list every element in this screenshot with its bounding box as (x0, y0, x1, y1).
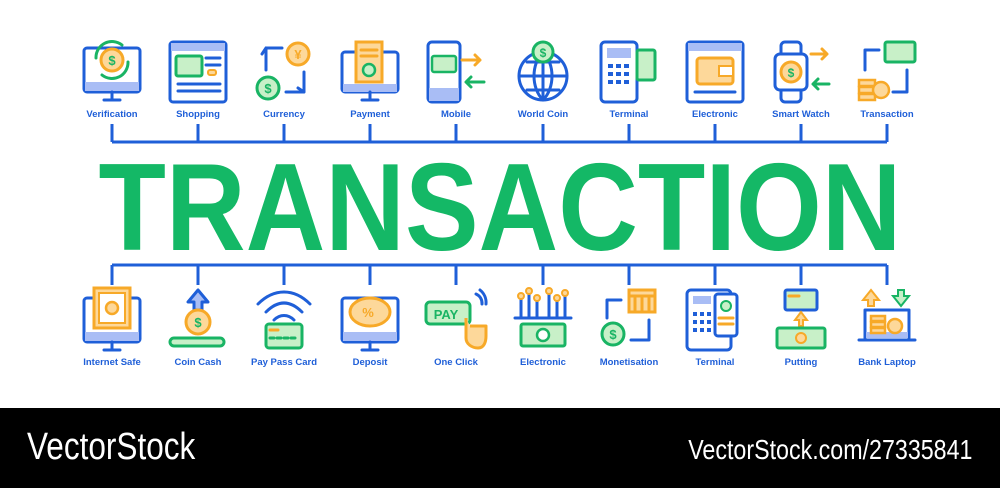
icon: transaction: Transaction (860, 109, 914, 120)
icon: verification: $ (108, 53, 116, 68)
icon: smart watch: $ (788, 66, 795, 80)
icon: transaction (859, 42, 915, 120)
icon: verification (84, 41, 140, 120)
icon: terminal check: Terminal (696, 357, 734, 368)
icon: one click (426, 290, 486, 368)
icon: terminal: Terminal (610, 109, 648, 120)
icon: putting: Putting (785, 357, 818, 368)
icon: deposit: % (362, 305, 374, 320)
icon: world coin (518, 42, 568, 120)
icon: payment: Payment (350, 109, 391, 120)
icon: one click: PAY (434, 307, 459, 322)
footer (0, 408, 1000, 488)
icon: mobile: Mobile (441, 109, 471, 120)
icon: monetisation: $ (609, 327, 617, 342)
icon: putting (777, 290, 825, 368)
title: TRANSACTION (98, 138, 902, 276)
footer brand: VectorStock (27, 426, 195, 468)
icon: verification: Verification (86, 109, 138, 120)
icon: monetisation (600, 290, 658, 368)
icon: currency (257, 43, 309, 120)
icon: internet safe: Internet Safe (83, 357, 141, 368)
connector lines (112, 124, 887, 285)
icon: smart watch: Smart Watch (772, 109, 830, 120)
icon: pay pass card: Pay Pass Card (251, 357, 317, 368)
icon: shopping (170, 42, 226, 120)
icon: currency: Currency (263, 109, 306, 120)
icon: world coin: $ (540, 46, 547, 60)
icon: currency: $ (264, 81, 272, 96)
icon: deposit: Deposit (353, 357, 388, 368)
icon: currency: ¥ (294, 47, 302, 62)
icon: world coin: World Coin (518, 109, 568, 120)
icon: coin cash: Coin Cash (175, 357, 222, 368)
icon: electronic circuit: Electronic (520, 357, 566, 368)
icon: terminal (601, 42, 655, 120)
icon: bank laptop (858, 290, 916, 368)
icon: smart watch (772, 42, 830, 120)
icon: deposit (342, 298, 398, 368)
icon: coin cash: $ (194, 315, 202, 330)
footer url: VectorStock.com/27335841 (688, 434, 972, 465)
icon: electronic wallet: Electronic (692, 109, 738, 120)
icon: monetisation: Monetisation (600, 357, 658, 368)
icon: pay pass card (251, 292, 317, 368)
icon: one click: One Click (434, 357, 479, 368)
icon: electronic circuit (515, 288, 571, 368)
icon: electronic wallet (687, 42, 743, 120)
icon: internet safe (83, 288, 141, 368)
icon: terminal check (687, 290, 737, 368)
icon: mobile (428, 42, 484, 120)
icon: payment (342, 42, 398, 120)
icon: shopping: Shopping (176, 109, 220, 120)
icon: coin cash (170, 290, 224, 368)
icon: bank laptop: Bank Laptop (858, 357, 916, 368)
